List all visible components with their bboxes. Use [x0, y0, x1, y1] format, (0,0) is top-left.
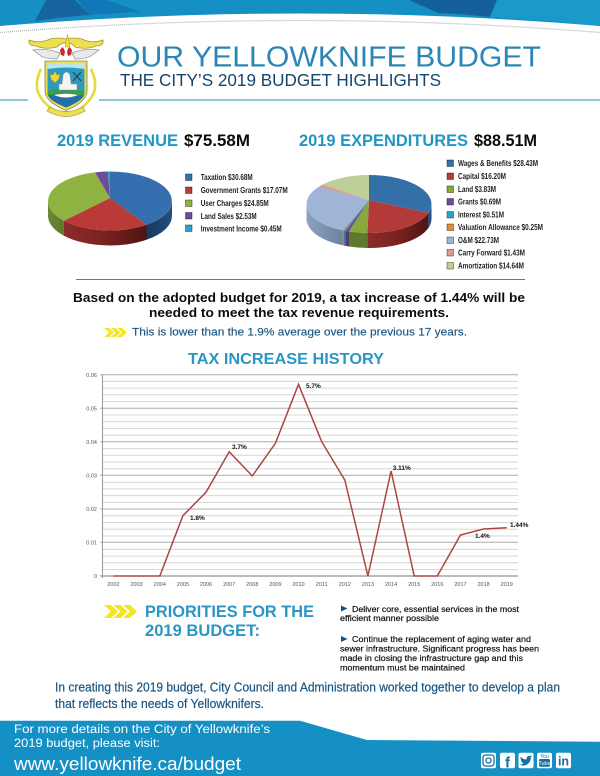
priority one	[340, 605, 520, 623]
priority two	[340, 635, 539, 672]
chart heading: TAX INCREASE HISTORY	[188, 351, 384, 368]
social media icons	[481, 753, 571, 772]
y axis labels: 0.02	[86, 507, 97, 513]
shield water	[48, 95, 84, 108]
expenditures heading: 2019 EXPENDITURES	[299, 131, 468, 150]
icon: linkedin: in	[558, 754, 569, 768]
title: OUR YELLOWKNIFE BUDGET	[117, 42, 541, 74]
revenue heading: $75.58M	[184, 131, 250, 150]
footer text: 2019 budget, please visit:	[14, 738, 160, 750]
x axis labels: 2002	[107, 582, 120, 588]
bottom scroll	[47, 107, 85, 116]
data labels: 3.11%	[393, 465, 411, 472]
data labels	[190, 383, 529, 540]
expenditures pie chart	[306, 175, 432, 248]
icon: instagram	[483, 755, 494, 766]
header rule	[0, 99, 600, 101]
icon: priorities chevrons	[104, 605, 137, 618]
expenditures legend: Valuation Allowance $0.25M	[458, 223, 543, 232]
boat	[54, 94, 78, 98]
revenue legend: Land Sales $2.53M	[201, 212, 257, 221]
revenue pie chart	[48, 171, 172, 245]
priority two: made in closing the infrastructure gap and this	[340, 654, 523, 663]
data labels: 1.44%	[510, 522, 529, 529]
lighthouse	[59, 72, 77, 90]
y axis labels: 0.01	[86, 540, 97, 546]
expenditures legend: Capital $16.20M	[458, 172, 506, 181]
footer text: For more details on the City of Yellowknife’s	[14, 724, 270, 736]
x axis labels: 2003	[130, 582, 143, 588]
x axis labels: 2019	[501, 582, 513, 588]
priorities heading	[145, 603, 314, 640]
closing statement: In creating this 2019 budget, City Council and Administration worked together to develop a plan	[55, 680, 560, 695]
icon: youtube: Tube	[538, 761, 551, 767]
side scrolls	[37, 69, 95, 114]
revenue heading	[57, 131, 250, 150]
footer text: www.yellowknife.ca/budget	[13, 754, 241, 774]
y axis labels: 0.04	[86, 440, 97, 446]
tax increase statement: Based on the adopted budget for 2019, a tax increase of 1.44% will be	[73, 290, 525, 305]
x axis labels: 2009	[269, 582, 282, 588]
priorities heading: 2019 BUDGET:	[145, 622, 260, 640]
y axis labels: 0.05	[86, 406, 97, 412]
x axis labels: 2014	[385, 582, 397, 588]
x axis labels: 2004	[154, 582, 166, 588]
x axis labels: 2008	[246, 582, 258, 588]
data line	[114, 384, 507, 576]
y axis labels: 0	[94, 574, 97, 580]
priority one: efficient manner possible	[340, 614, 439, 623]
expenditures legend: Land $3.83M	[458, 185, 496, 194]
icon: twitter	[520, 756, 532, 766]
revenue legend: Government Grants $17.07M	[201, 186, 288, 195]
closing statement: that reflects the needs of Yellowknifers.	[55, 696, 264, 711]
x axis labels: 2013	[362, 582, 374, 588]
data labels: 1.8%	[190, 515, 205, 522]
red leaves	[60, 47, 72, 56]
expenditures legend: Carry Forward $1.43M	[458, 248, 525, 258]
footer text	[13, 724, 270, 774]
revenue legend: Taxation $30.68M	[201, 173, 253, 182]
shield sky	[48, 64, 84, 69]
x axis labels: 2018	[477, 582, 490, 588]
y axis labels	[86, 373, 97, 580]
revenue legend: User Charges $24.85M	[201, 199, 269, 208]
x axis labels: 2007	[223, 582, 235, 588]
city crest logo	[29, 34, 103, 116]
gold leaf	[50, 71, 60, 83]
x axis labels	[107, 582, 513, 588]
closing statement	[55, 680, 560, 711]
priority two: sewer infrastructure. Significant progress has been	[340, 645, 539, 654]
expenditures legend: Interest $0.51M	[458, 210, 504, 220]
tax increase statement	[73, 290, 525, 320]
x axis labels: 2010	[292, 582, 305, 588]
tax increase statement: needed to meet the tax revenue requirements.	[149, 305, 449, 320]
expenditures legend: O&M $22.73M	[458, 236, 499, 245]
y axis labels: 0.06	[86, 373, 97, 379]
x axis labels: 2015	[408, 582, 420, 588]
icon: yellow chevrons	[104, 328, 127, 337]
wings	[33, 49, 99, 59]
x axis labels: 2016	[431, 582, 443, 588]
average comparison note: This is lower than the 1.9% average over the previous 17 years.	[132, 327, 467, 339]
priority two: Continue the replacement of aging water and	[352, 635, 531, 644]
subtitle: THE CITY’S 2019 BUDGET HIGHLIGHTS	[120, 70, 441, 90]
x axis labels: 2012	[339, 582, 351, 588]
top scroll	[29, 38, 103, 48]
shield hills	[48, 88, 84, 95]
line chart: tax increase history	[86, 373, 529, 588]
y axis labels: 0.03	[86, 474, 97, 480]
icon: youtube	[538, 754, 551, 767]
top star	[65, 34, 70, 47]
expenditures heading: $88.51M	[474, 131, 537, 150]
revenue legend: Investment Income $0.45M	[201, 224, 282, 234]
x axis labels: 2006	[200, 582, 212, 588]
priority one: Deliver core, essential services in the most	[352, 605, 520, 614]
expenditures legend: Amortization $14.64M	[458, 262, 524, 270]
data labels: 1.4%	[475, 533, 490, 540]
data labels: 3.7%	[232, 444, 247, 451]
x axis labels: 2017	[454, 582, 467, 588]
priorities heading: PRIORITIES FOR THE	[145, 603, 314, 621]
revenue heading: 2019 REVENUE	[57, 131, 178, 150]
priority two: momentum must be maintained	[340, 664, 465, 672]
footer band	[0, 721, 600, 776]
expenditures legend: Grants $0.69M	[458, 198, 501, 206]
header band	[0, 0, 600, 32]
expenditures legend: Wages & Benefits $28.43M	[458, 159, 538, 168]
x axis labels: 2005	[177, 582, 189, 588]
shield	[45, 61, 87, 110]
expenditures legend	[447, 159, 543, 270]
crossed tools	[73, 72, 81, 81]
icon: facebook: f	[505, 754, 511, 772]
data labels: 5.7%	[306, 383, 321, 390]
icon: youtube: You	[540, 754, 549, 760]
x axis labels: 2011	[316, 582, 328, 588]
revenue legend	[186, 173, 288, 234]
